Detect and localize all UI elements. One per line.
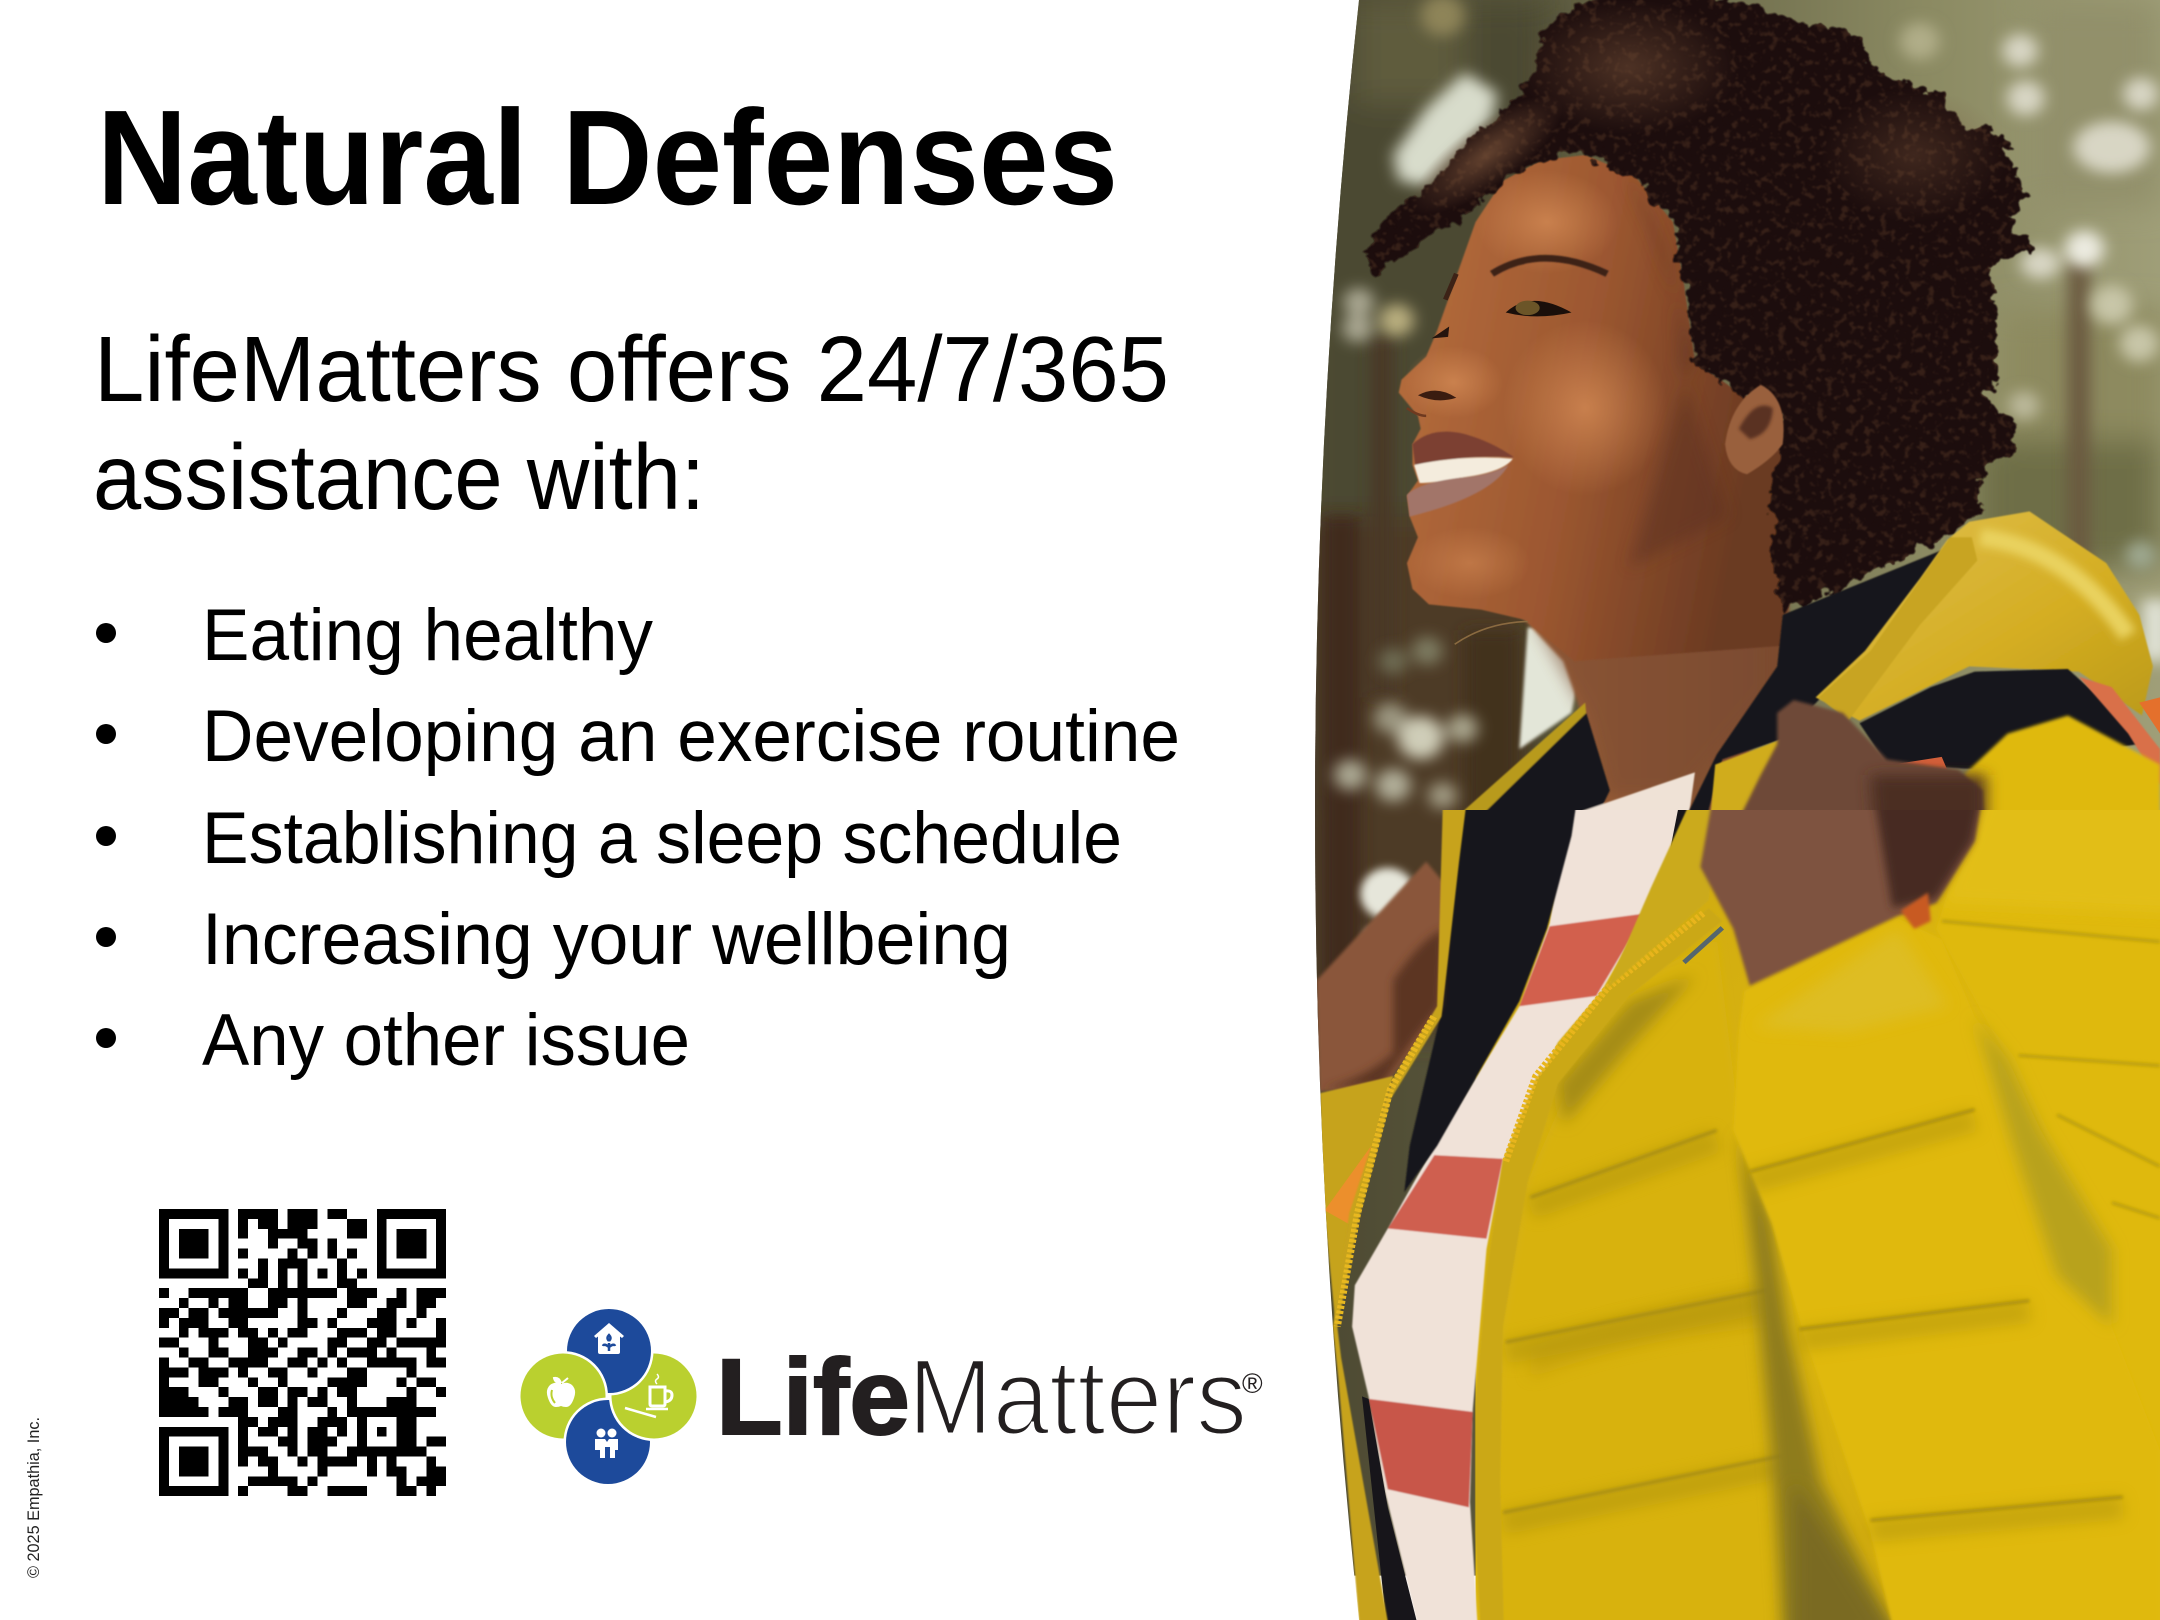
black collar sliver bbox=[1670, 810, 1688, 848]
title: Natural Defenses bbox=[97, 82, 1118, 233]
hair bbox=[1363, 0, 2035, 615]
right hand lower part bbox=[1698, 810, 1982, 987]
ear bbox=[1725, 385, 1784, 474]
bullet list: Eating healthy bbox=[202, 595, 653, 676]
black collar bbox=[1684, 542, 1980, 852]
left zipper band bbox=[1333, 774, 1470, 1620]
sleeve puff shading bbox=[1750, 1120, 2123, 1531]
dark gap between chest and sleeve bbox=[1739, 1130, 1898, 1620]
logo wordmark: ® bbox=[1242, 1368, 1263, 1399]
logo: LifeMatters bbox=[520, 1309, 1263, 1484]
logo wordmark bbox=[716, 1336, 1263, 1457]
left collar bbox=[1417, 703, 1695, 852]
bullet list bbox=[96, 595, 1180, 1081]
photo: smiling woman in yellow jacket bbox=[1273, 0, 2160, 1620]
chest quilting seams bbox=[1503, 1130, 1783, 1513]
photo upper half: woman's head bbox=[1363, 0, 2160, 852]
smile bbox=[1407, 432, 1514, 517]
right zipper band bbox=[1474, 947, 1690, 1620]
back panel bbox=[2058, 1015, 2160, 1620]
orange lining bbox=[2079, 677, 2160, 785]
intro text block: LifeMatters offers 24/7/365 bbox=[94, 317, 1169, 421]
black jacket lining bbox=[1404, 810, 1576, 1192]
jacket base bbox=[1476, 874, 2112, 1620]
chest panel shading bbox=[1486, 939, 1794, 1620]
yellow hood bbox=[1816, 511, 2153, 721]
intro text block bbox=[93, 317, 1169, 529]
left hand bbox=[1316, 862, 1448, 1092]
chest puff shading bbox=[1503, 1141, 1783, 1523]
zip band under hand bbox=[1707, 739, 1794, 852]
right hand upper part bbox=[1722, 700, 1986, 852]
yellow shoulder bbox=[1964, 715, 2160, 852]
sweater bbox=[1352, 774, 1695, 1620]
nose bbox=[1407, 391, 1456, 416]
logo wordmark: Life bbox=[716, 1336, 910, 1457]
eyes and eyebrow bbox=[1432, 258, 1607, 338]
bullet list: Increasing your wellbeing bbox=[202, 899, 1011, 980]
photo lower half: jacket and sweater bbox=[1316, 774, 2160, 1620]
icon: house with plant bbox=[594, 1323, 624, 1354]
photo background: blurred forest bbox=[1273, 0, 2160, 1576]
left jacket panel bbox=[1320, 1076, 1393, 1327]
stray hair bbox=[1455, 621, 1528, 644]
sleeve bbox=[1734, 922, 2098, 1620]
icon: family bbox=[596, 1428, 606, 1438]
copyright: © 2025 Empathia, Inc. bbox=[24, 1417, 43, 1578]
bullet list: Establishing a sleep schedule bbox=[202, 798, 1122, 879]
collar top band bbox=[1608, 810, 1710, 988]
QR code bbox=[159, 1209, 446, 1496]
icon: mug and pencil bbox=[650, 1387, 665, 1406]
bullet list: Developing an exercise routine bbox=[202, 696, 1180, 777]
icon: apple bbox=[547, 1383, 575, 1407]
logo mark: four-circle pinwheel bbox=[520, 1309, 696, 1484]
face bbox=[1399, 155, 1783, 661]
neck bbox=[1522, 604, 1791, 810]
bullet list: Any other issue bbox=[202, 1000, 690, 1081]
face highlights bbox=[1404, 170, 1667, 599]
intro text block: assistance with: bbox=[93, 425, 705, 529]
black shoulder band bbox=[1859, 669, 2139, 770]
logo wordmark: Matters bbox=[908, 1336, 1247, 1457]
